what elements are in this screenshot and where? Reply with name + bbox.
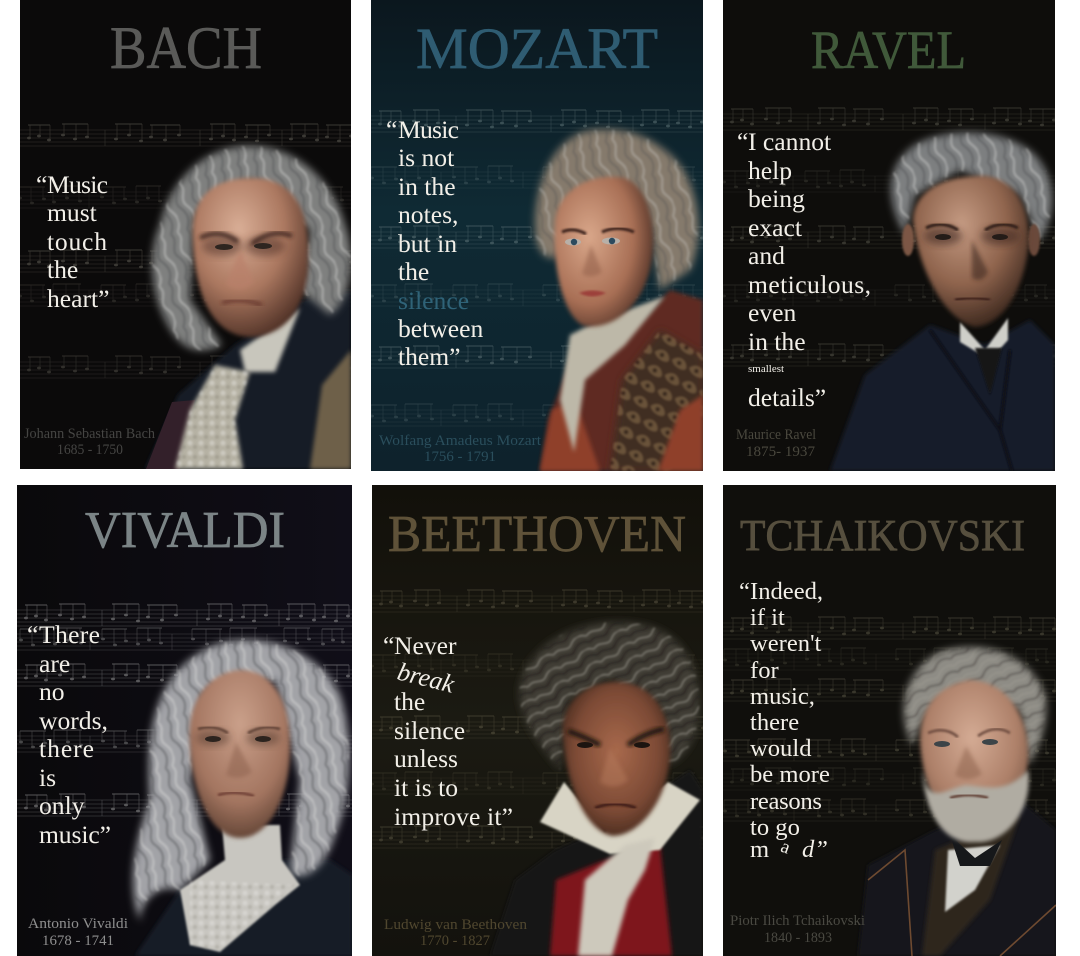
quote: Tchaikovski: Indeed, <box>750 578 823 605</box>
quote: Ravel: in the <box>748 327 806 356</box>
credit: Tchaikovski: 1840 - 1893 <box>764 930 832 946</box>
title: TCHAIKOVSKI: TCHAIKOVSKI <box>740 511 1025 560</box>
quote: Bach <box>36 170 110 313</box>
quote: Tchaikovski <box>739 578 830 863</box>
quote: Ravel: and <box>748 241 785 270</box>
quote: Beethoven: “ <box>383 631 394 660</box>
quote: Tchaikovski: weren't <box>750 630 822 657</box>
quote: Beethoven: it is to <box>394 773 458 802</box>
portrait: Tchaikovski <box>858 647 1056 956</box>
quote: Bach: touch <box>47 227 107 256</box>
quote: Tchaikovski: there <box>750 709 799 736</box>
quote: Vivaldi: There <box>39 620 100 649</box>
quote: Tchaikovski: be more <box>750 761 830 788</box>
credit: Vivaldi: 1678 - 1741 <box>42 933 114 949</box>
credit: Ravel <box>736 427 816 460</box>
quote: Mozart: between <box>398 314 483 343</box>
quote: Beethoven: the <box>394 687 425 716</box>
credit: Mozart: Wolfang Amadeus Mozart <box>379 433 541 449</box>
credit: Mozart: 1756 - 1791 <box>424 449 496 465</box>
quote: Ravel: being <box>748 184 805 213</box>
quote: Ravel: details” <box>748 383 826 412</box>
quote: Beethoven: break <box>395 657 458 699</box>
quote: Vivaldi: only <box>39 791 85 820</box>
quote: Tchaikovski: if it <box>750 604 785 631</box>
quote: Ravel: meticulous, <box>748 270 871 299</box>
credit: Bach <box>24 426 156 458</box>
quote: Tchaikovski: m <box>750 836 769 863</box>
panel: Bach <box>11 0 360 469</box>
quote: Ravel: help <box>748 156 792 185</box>
panel: Mozart <box>363 0 711 471</box>
quote: Mozart: in the <box>398 172 456 201</box>
quote: Mozart: them” <box>398 342 461 371</box>
quote: Bach: must <box>47 198 97 227</box>
quote: Mozart: the <box>398 257 429 286</box>
quote: Vivaldi: are <box>39 649 70 678</box>
quote: Mozart: but in <box>398 229 457 258</box>
quote: Vivaldi: is <box>39 763 56 792</box>
quote: Mozart: silence <box>398 286 469 315</box>
quote: Bach: heart” <box>47 284 110 313</box>
quote: Ravel: smallest <box>748 363 784 375</box>
quote: Ravel: exact <box>748 213 802 242</box>
quote: Tchaikovski: for <box>750 657 779 684</box>
sheet music: Beethoven <box>363 590 712 848</box>
quote: Bach: Music <box>47 170 108 199</box>
quote: Beethoven <box>383 631 513 831</box>
credit: Bach: 1685 - 1750 <box>57 442 123 458</box>
quote: Ravel: even <box>748 298 797 327</box>
sheet music: Vivaldi <box>12 604 357 816</box>
portrait: Mozart <box>535 129 703 471</box>
quote: Vivaldi: words, <box>39 706 108 735</box>
credit: Bach: Johann Sebastian Bach <box>24 426 156 442</box>
credit: Beethoven: Ludwig van Beethoven <box>384 917 528 933</box>
quote: Mozart: Music <box>398 115 459 144</box>
sheet music: Tchaikovski <box>716 617 1063 821</box>
quote: Tchaikovski: “ <box>739 578 750 605</box>
quote: Vivaldi <box>27 620 111 849</box>
quote: Mozart: “ <box>386 115 397 144</box>
credit: Ravel: Maurice Ravel <box>736 427 816 443</box>
quote: Tchaikovski: would <box>750 735 811 762</box>
portrait: Vivaldi <box>133 640 352 956</box>
credit: Beethoven <box>384 917 528 949</box>
quote: Bach: “ <box>36 170 47 199</box>
panel: Beethoven <box>363 485 712 956</box>
credit: Ravel: 1875- 1937 <box>746 444 815 460</box>
portrait: Beethoven <box>490 622 703 956</box>
title: BEETHOVEN: BEETHOVEN <box>388 506 686 563</box>
credit: Tchaikovski: Piotr Ilich Tchaikovski <box>730 913 865 929</box>
title: RAVEL: RAVEL <box>811 20 966 80</box>
quote: Tchaikovski: to go <box>750 814 800 841</box>
quote: Tchaikovski: d” <box>802 836 828 863</box>
title: VIVALDI: VIVALDI <box>85 502 285 559</box>
panel: Tchaikovski <box>716 485 1063 956</box>
quote: Mozart <box>386 115 483 371</box>
credit: Tchaikovski <box>730 913 865 946</box>
panel: Vivaldi <box>12 485 357 956</box>
title: BACH: BACH <box>110 15 262 81</box>
sheet music: Bach <box>11 124 360 378</box>
quote: Beethoven: unless <box>394 744 458 773</box>
quote: Tchaikovski: music, <box>750 683 815 710</box>
quote: Vivaldi: no <box>39 677 65 706</box>
quote: Beethoven: Never <box>394 631 457 660</box>
portrait: Ravel <box>830 133 1055 471</box>
quote: Tchaikovski: a <box>778 836 794 859</box>
credit: Vivaldi <box>28 916 128 949</box>
quote: Mozart: is not <box>398 143 454 172</box>
quote: Ravel: “ <box>737 127 748 156</box>
quote: Tchaikovski: reasons <box>750 788 822 815</box>
credit: Mozart <box>379 433 541 465</box>
quote: Vivaldi: “ <box>27 620 38 649</box>
panel: Ravel <box>715 0 1063 471</box>
quote: Mozart: notes, <box>398 200 458 229</box>
quote: Ravel: I cannot <box>748 127 831 156</box>
quote: Ravel <box>737 127 871 412</box>
quote: Beethoven: silence <box>394 716 465 745</box>
sheet music: Ravel <box>715 108 1063 366</box>
portrait: Bach <box>145 146 351 469</box>
quote: Bach: the <box>47 255 78 284</box>
sheet music: Mozart <box>363 110 711 426</box>
quote: Vivaldi: there <box>39 734 94 763</box>
quote: Vivaldi: music” <box>39 820 111 849</box>
credit: Vivaldi: Antonio Vivaldi <box>28 916 128 932</box>
title: MOZART: MOZART <box>416 16 658 81</box>
quote: Beethoven: improve it” <box>394 802 513 831</box>
credit: Beethoven: 1770 - 1827 <box>420 933 490 949</box>
